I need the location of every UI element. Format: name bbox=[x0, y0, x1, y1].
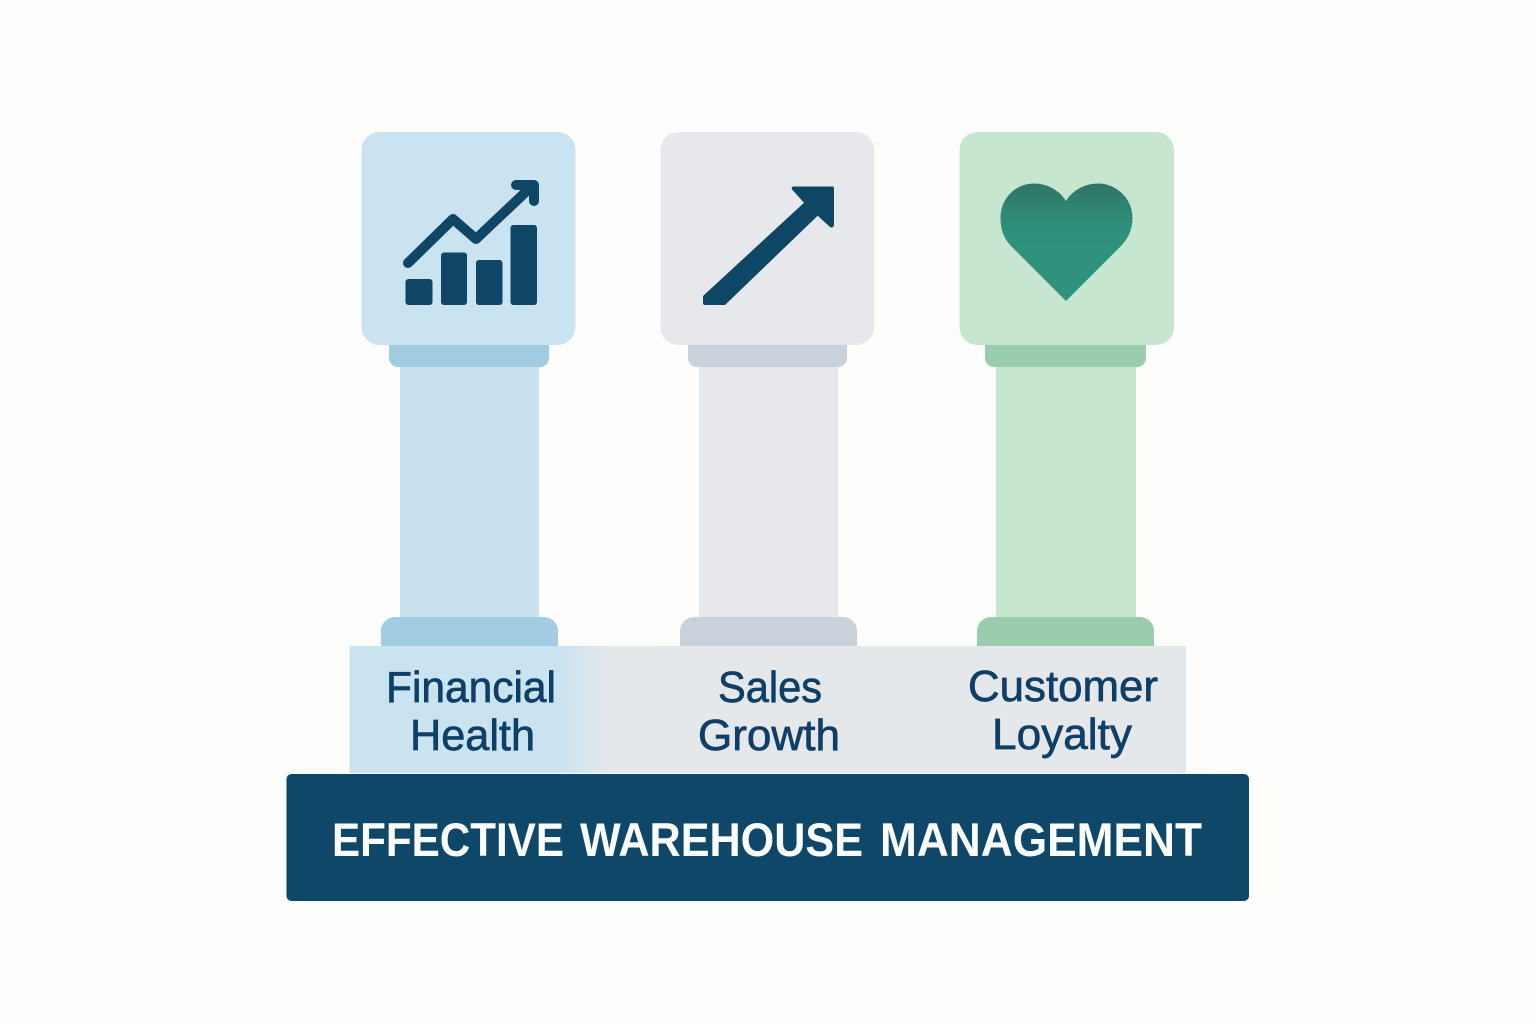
label: Customer Loyalty bbox=[968, 662, 1158, 759]
pillar: Customer Loyalty bbox=[960, 132, 1174, 646]
foundation banner bbox=[286, 774, 1249, 901]
banner title: WAREHOUSE bbox=[580, 813, 863, 866]
icon: rising line and bar chart bbox=[406, 185, 537, 305]
banner title: MANAGEMENT bbox=[880, 813, 1202, 866]
label: Sales Growth: Sales bbox=[718, 663, 822, 712]
pillar: Financial Health bbox=[362, 132, 576, 646]
label: Sales Growth: Growth bbox=[698, 711, 840, 760]
banner title bbox=[332, 813, 1202, 866]
banner title: EFFECTIVE bbox=[332, 813, 564, 866]
label: Financial Health: Financial bbox=[386, 663, 556, 712]
platform with pillar labels bbox=[350, 646, 1186, 773]
icon: diagonal growth arrow bbox=[703, 186, 834, 305]
label: Financial Health: Health bbox=[410, 711, 535, 760]
label: Sales Growth bbox=[698, 663, 840, 760]
pillar: Sales Growth bbox=[660, 132, 874, 646]
label: Customer Loyalty: Customer bbox=[968, 662, 1158, 711]
label: Customer Loyalty: Loyalty bbox=[992, 710, 1132, 759]
icon: heart bbox=[1000, 184, 1132, 301]
label: Financial Health bbox=[386, 663, 556, 760]
